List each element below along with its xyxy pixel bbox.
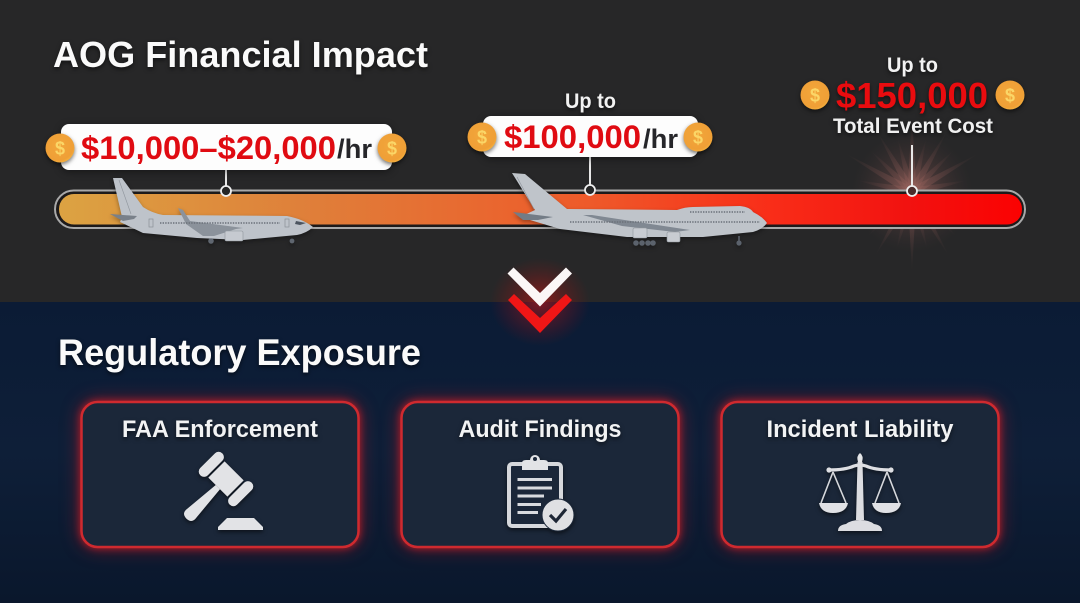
marker: total event cost point xyxy=(907,145,917,196)
panel: regulatory exposure background xyxy=(0,302,1080,603)
panel: Incident Liability xyxy=(722,402,998,547)
callout: $10,000–$20,000/hr: $10,000–$20,000 xyxy=(81,130,336,166)
callout: $10,000–$20,000/hr: /hr xyxy=(337,134,372,164)
callout: up to $100,000/hr: /hr xyxy=(643,124,678,154)
arrow: double chevron between sections xyxy=(490,258,590,346)
callout: $10,000–$20,000/hr xyxy=(46,124,406,170)
icon: gavel xyxy=(168,450,263,537)
label: FAA Enforcement: FAA Enforcement xyxy=(122,416,318,443)
heading: Regulatory Exposure: Regulatory Exposure xyxy=(58,332,421,373)
callout: up to $150,000 total event cost: Up to xyxy=(887,54,938,77)
icon: scales of justice xyxy=(819,453,901,531)
callout: up to $150,000 total event cost: $150,000 xyxy=(836,75,988,116)
panel: AOG financial impact background xyxy=(0,0,1080,302)
cost timeline bar xyxy=(55,190,1025,228)
panel: Audit Findings xyxy=(402,402,678,547)
panel: FAA Enforcement xyxy=(82,402,358,547)
plane: narrow-body aircraft xyxy=(110,178,313,244)
plane: wide-body aircraft xyxy=(512,173,767,246)
marker: first cost point xyxy=(221,170,231,196)
label: Incident Liability: Incident Liability xyxy=(766,416,954,443)
icon: clipboard with check mark xyxy=(509,455,574,531)
marker: second cost point xyxy=(585,157,595,195)
label: Audit Findings: Audit Findings xyxy=(458,416,622,443)
callout: up to $150,000 total event cost: Total Event Cost xyxy=(833,115,993,138)
callout: up to $100,000/hr: Up to xyxy=(565,90,616,113)
starburst behind the total cost marker xyxy=(843,115,981,272)
callout: up to $100,000/hr xyxy=(468,90,712,157)
callout: up to $150,000 total event cost xyxy=(800,54,1024,138)
title: AOG Financial Impact: AOG Financial Impact xyxy=(53,34,428,75)
callout: up to $100,000/hr: $100,000 xyxy=(504,119,641,155)
